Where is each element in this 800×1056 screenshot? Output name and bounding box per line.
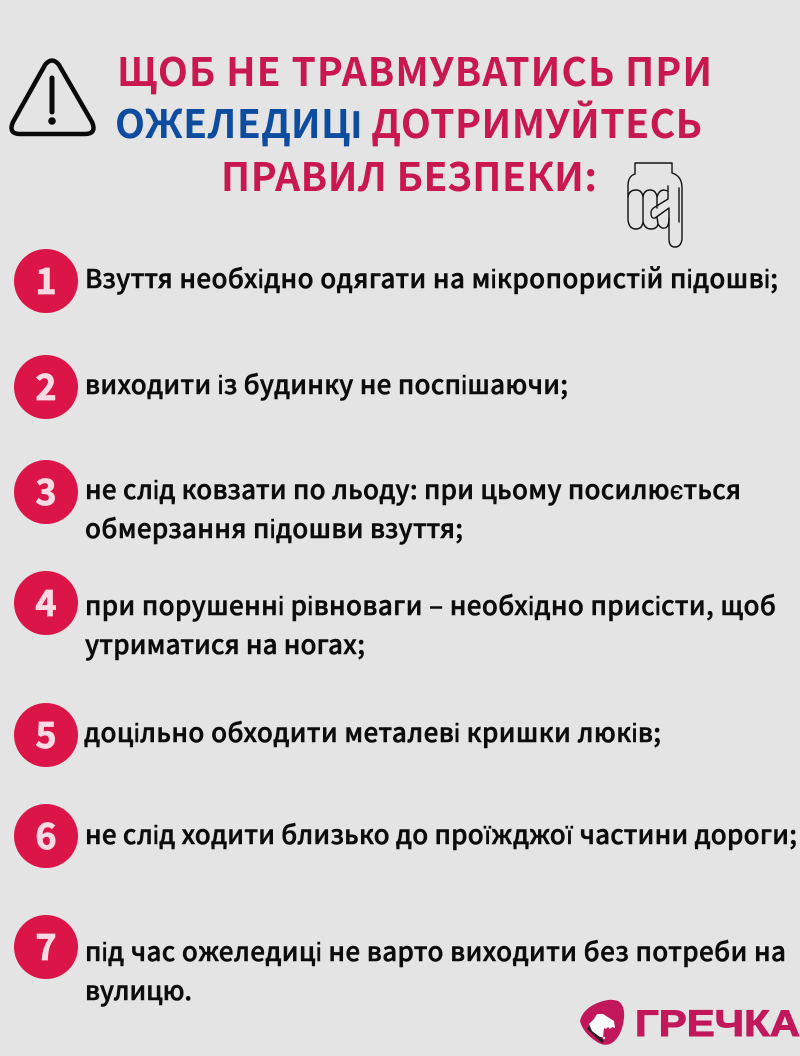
title: ОЖЕЛЕДИЦІ ДОТРИМУЙТЕСЬ <box>115 94 702 150</box>
title <box>115 42 712 203</box>
item 5 <box>14 703 661 767</box>
icon: warning triangle <box>12 60 93 134</box>
item 2: виходити із будинку не поспішаючи; <box>85 365 568 402</box>
item 4: 4 <box>35 575 57 627</box>
title: ПРАВИЛ БЕЗПЕКИ: <box>221 147 597 203</box>
icon: dog head badge <box>580 1000 624 1045</box>
item 5: 5 <box>35 707 57 759</box>
title: ЩОБ НЕ ТРАВМУВАТИСЬ ПРИ <box>117 42 712 98</box>
item 6: не слід ходити близько до проїжджої частини дороги; <box>85 815 797 852</box>
item 1 <box>14 249 778 313</box>
wordmark: ГРЕЧКА <box>635 1003 800 1044</box>
item 4: при порушенні рівноваги – необхідно присісти, щоб <box>85 586 776 623</box>
item 3: 3 <box>35 464 57 516</box>
item 6: 6 <box>35 808 57 860</box>
item 1: Взуття необхідно одягати на мікропористій підошві; <box>85 259 778 296</box>
item 3 <box>14 460 741 546</box>
logo: Гречка <box>580 1000 800 1045</box>
item 2 <box>14 355 568 419</box>
item 4 <box>14 571 776 662</box>
item 7: під час ожеледиці не варто виходити без потреби на <box>85 932 786 969</box>
item 4: утриматися на ногах; <box>85 625 365 662</box>
item 1: 1 <box>35 253 57 305</box>
item 3: не слід ковзати по льоду: при цьому посилюється <box>85 470 741 507</box>
item 7: вулицю. <box>85 971 192 1008</box>
item 2: 2 <box>35 359 57 411</box>
item 6 <box>14 804 797 868</box>
icon: pointing hand <box>628 163 682 247</box>
item 3: обмерзання підошви взуття; <box>85 509 463 546</box>
item 7 <box>14 915 786 1008</box>
item 7: 7 <box>35 919 57 971</box>
item 5: доцільно обходити металеві кришки люків; <box>84 713 661 750</box>
